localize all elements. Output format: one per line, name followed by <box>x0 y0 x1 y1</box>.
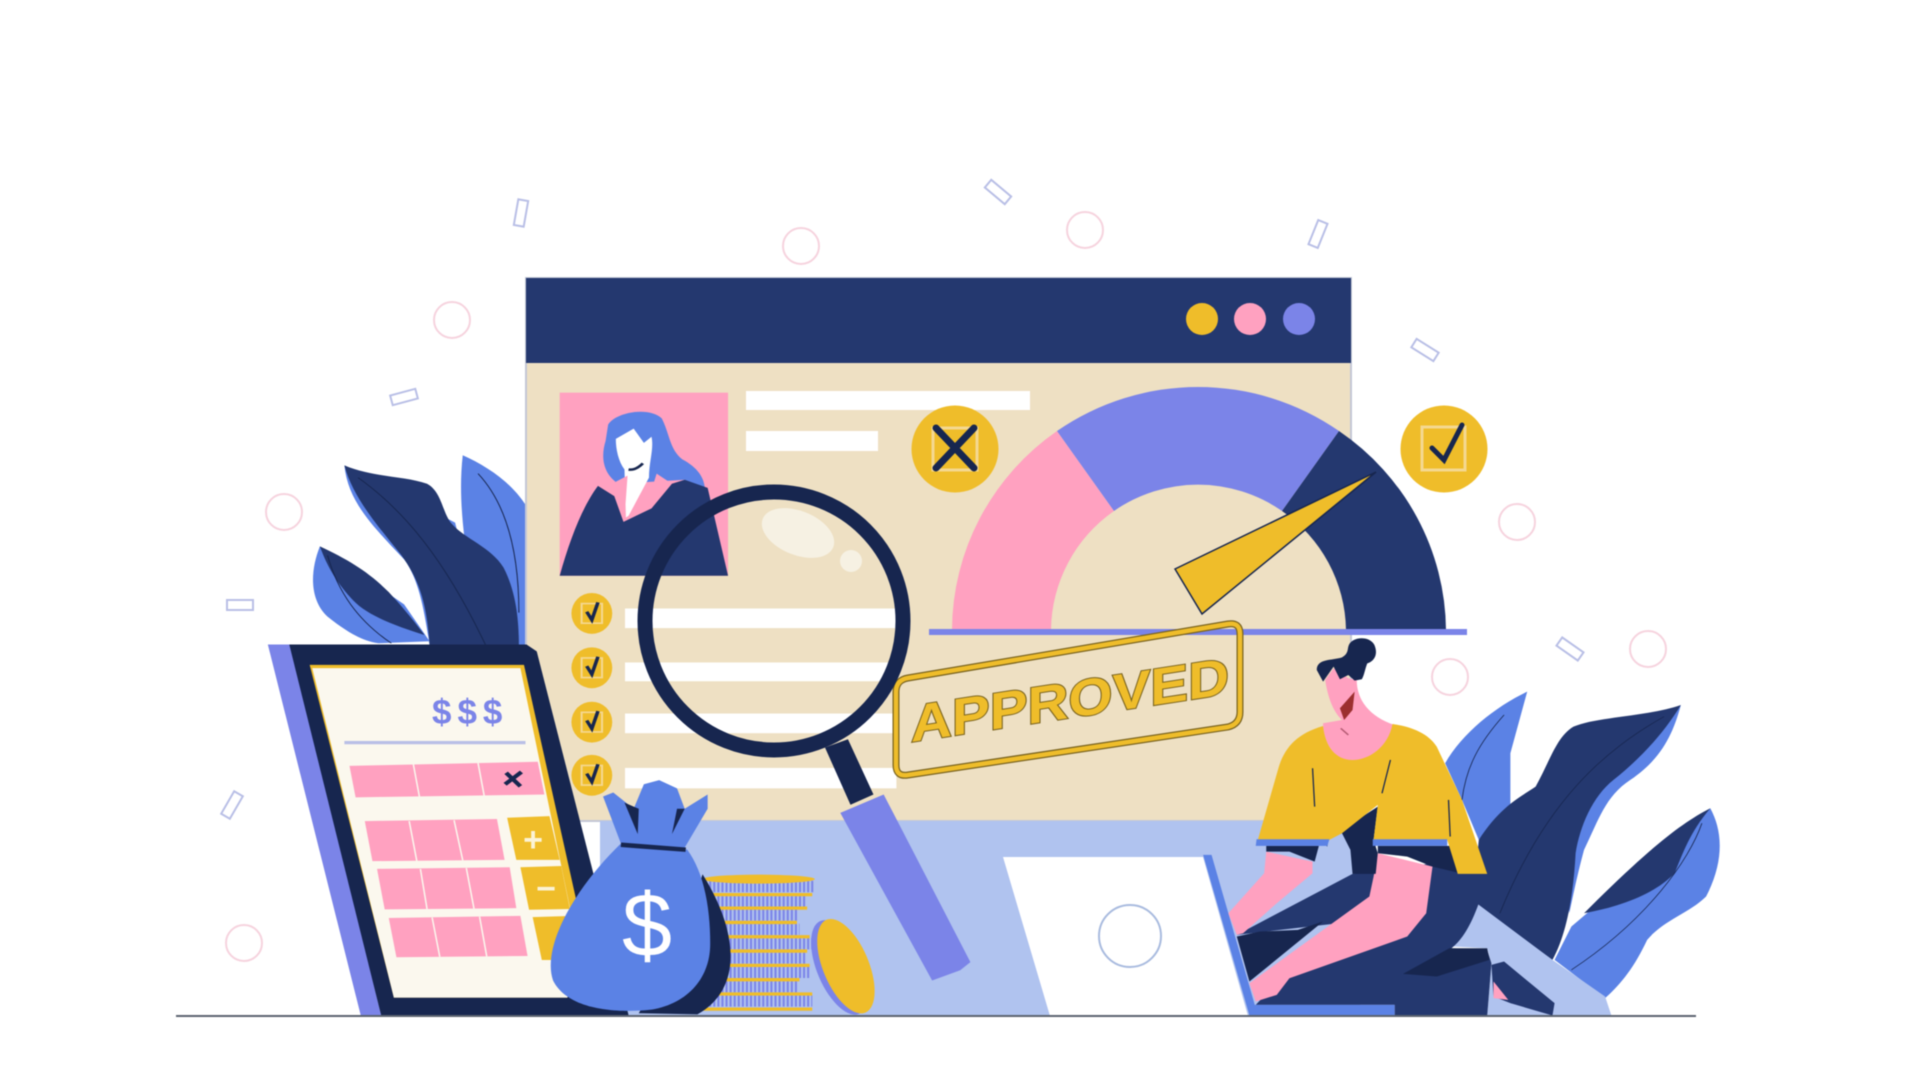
right plant leaves <box>1445 692 1720 998</box>
fallen coin <box>799 914 886 1020</box>
floor shadow shape <box>1454 903 1611 1016</box>
icon: approved check <box>1400 406 1488 492</box>
laptop lid edge <box>1203 855 1258 1016</box>
shirt inner dark <box>1313 807 1378 874</box>
mouth and hair strand <box>1340 692 1355 720</box>
yellow shirt <box>1258 724 1487 874</box>
seated woman with laptop <box>1203 638 1611 1016</box>
dark waist shadow <box>1403 948 1489 977</box>
left arm <box>1228 852 1313 935</box>
toes <box>1494 982 1508 1000</box>
window title bar <box>526 278 1351 363</box>
decorative confetti rectangles <box>221 180 1584 819</box>
dollar sign: $ <box>622 876 672 976</box>
shirt fold lines <box>1313 760 1450 837</box>
magnifying glass <box>645 492 970 980</box>
plus key label: + <box>523 821 543 859</box>
coin stack <box>703 875 886 1020</box>
desk surface <box>600 821 1360 1016</box>
torso legs <box>1237 863 1491 1016</box>
decorative circles <box>226 212 1666 961</box>
checklist rows <box>571 593 896 796</box>
browser window panel <box>526 278 1351 821</box>
sleeve shadows <box>1266 846 1458 873</box>
left plant leaves <box>313 455 527 645</box>
dark knee shadow <box>1237 922 1323 982</box>
gauge baseline <box>929 629 1467 635</box>
icon: rejected cross <box>912 406 998 492</box>
laptop screen <box>1003 857 1248 1016</box>
neck and chest <box>1323 668 1395 762</box>
hair and bun <box>1317 638 1376 682</box>
minus key label: − <box>536 870 556 908</box>
money bag <box>551 780 731 1014</box>
laptop base <box>1249 1005 1395 1016</box>
right arm <box>1249 853 1433 1002</box>
foot <box>1491 962 1555 1016</box>
stamp word: APPROVED <box>911 648 1229 754</box>
gauge needle <box>1175 472 1376 614</box>
profile portrait <box>560 393 728 576</box>
ground line <box>176 1015 1696 1017</box>
approved stamp <box>896 624 1240 775</box>
calculator <box>268 644 629 1015</box>
light gap beside arm <box>1313 833 1353 890</box>
sleeve bands <box>1256 839 1447 846</box>
calculator display symbols: $$$ <box>432 693 508 732</box>
gauge chart <box>929 387 1467 635</box>
heading placeholder bars <box>746 391 1030 451</box>
window control dots <box>1186 303 1315 335</box>
